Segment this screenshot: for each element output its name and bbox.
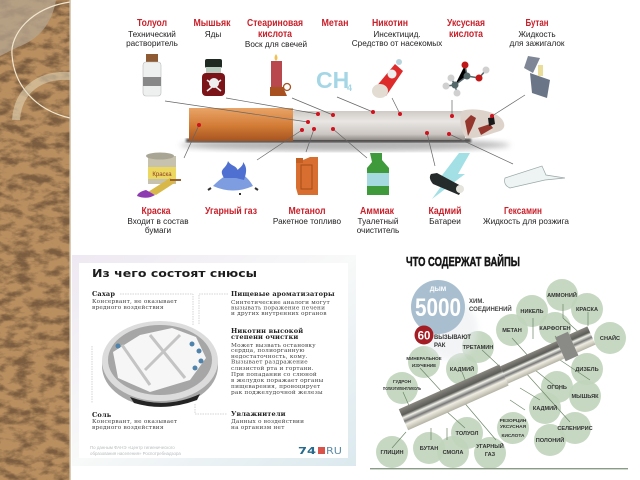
callout: high-purity nicotine: пищеварения, провоцирует	[231, 384, 320, 390]
callout: high-purity nicotine: При попадании со слюной	[231, 372, 317, 378]
icon: toluene bottle	[143, 54, 161, 96]
ingredient labels: МЕТАН	[502, 328, 522, 334]
top labels: Толуол	[137, 17, 167, 29]
ingredient labels: СМОЛА	[443, 450, 463, 456]
top labels: Метан	[322, 17, 348, 29]
ingredient labels: СЕЛЕНИРИС	[557, 426, 593, 432]
callout: food flavourings: и других внутренних органов	[231, 311, 327, 317]
bottom labels: Метанол	[288, 205, 326, 217]
top labels: Жидкость	[518, 30, 556, 39]
bottom labels: Жидкость для розжига	[483, 217, 569, 226]
ingredient labels: АММОНИЙ	[547, 291, 577, 299]
icon: lighter	[524, 56, 550, 98]
callout: sugar: вредного воздействия	[92, 305, 164, 311]
icon: acetic acid molecule	[442, 62, 490, 96]
callout: humectants: Данных о воздействии	[231, 419, 304, 425]
callout: high-purity nicotine	[231, 327, 324, 396]
top labels: Яды	[205, 30, 221, 39]
logo: 74.RU	[298, 446, 342, 457]
logo: 74.RU: 74	[298, 446, 316, 457]
callout: salt: вредного воздействия	[92, 425, 164, 431]
stat: 5000 chemical compounds: СОЕДИНЕНИЙ	[469, 305, 512, 313]
ingredient labels: БУТАН	[420, 446, 438, 452]
stat: 5000 chemical compounds	[411, 280, 512, 360]
stat: 5000 chemical compounds: 5000	[415, 294, 461, 322]
stat: 60 cause cancer	[414, 326, 471, 349]
icon: glass ampoule	[505, 166, 565, 188]
source footnote	[90, 445, 181, 456]
ingredient labels: ТОЛУОЛ	[456, 431, 479, 437]
ingredient labels: ДИЗЕЛЬ	[575, 367, 599, 373]
callout: humectants: на организм нет	[231, 425, 285, 431]
callout: high-purity nicotine: в желудок поражает органы	[231, 378, 324, 384]
ingredient labels: КАДМИЙ	[450, 365, 474, 373]
icon: fuel canister	[296, 157, 318, 195]
ingredient labels: КРАСКА	[576, 307, 598, 313]
ingredient labels: ПОЛОНИЙ	[536, 436, 564, 444]
leader lines	[392, 304, 590, 448]
icon: paint can and brush: Краска	[152, 172, 172, 178]
ingredient labels: ТРЕТАМИН	[463, 345, 493, 351]
source footnote: образования населения» Роспотребнадзора	[90, 451, 181, 456]
callout: salt: Консервант, не оказывает	[92, 419, 177, 425]
bottom labels: Краска	[142, 205, 171, 217]
top labels: Бутан	[526, 17, 548, 29]
callout: sugar	[92, 290, 177, 311]
source footnote: По данным ФАНЭ «Центр гигиенического	[90, 445, 175, 450]
bottom labels: очиститель	[357, 226, 399, 235]
callout: food flavourings: Синтетические аналоги могут	[231, 300, 330, 306]
top labels: Средство от насекомых	[352, 39, 442, 48]
snus tin illustration	[102, 321, 218, 407]
icon: paint can and brush	[137, 152, 181, 198]
background strip: crumpled paper texture	[0, 0, 71, 480]
ingredient labels: ИЗУЧЕНИЕ	[412, 363, 436, 368]
ingredient labels: ГУДРОН	[393, 379, 411, 384]
top labels: кислота	[449, 28, 483, 40]
top labels: Уксусная	[447, 17, 485, 29]
icon: methane formula: 4	[347, 83, 352, 93]
vape panel title: ЧТО СОДЕРЖАТ ВАЙПЫ	[406, 254, 520, 269]
ingredient labels: ГАЗ	[485, 452, 496, 458]
callout: high-purity nicotine: рак поджелудочной железы	[231, 390, 323, 396]
logo: 74.RU: RU	[326, 446, 342, 457]
bottom labels: Ракетное топливо	[273, 217, 342, 226]
top labels: для зажигалок	[510, 39, 565, 48]
callout: salt: Соль	[92, 411, 112, 419]
leader lines and red dots	[165, 95, 525, 166]
stat: 60 cause cancer: ВЫЗЫВАЮТ	[434, 335, 471, 341]
ingredient labels: ГЛИЦИН	[380, 450, 404, 456]
icon: nicotine spray	[372, 59, 403, 98]
top labels: Мышьяк	[194, 17, 231, 29]
top labels: Никотин	[372, 17, 408, 29]
bottom labels: Гексамин	[504, 205, 542, 217]
callout: humectants: Увлажнители	[231, 410, 286, 418]
callout: high-purity nicotine: сердца, полиорганную	[231, 348, 305, 354]
ingredient labels: КИСЛОТА	[502, 433, 525, 439]
callout: high-purity nicotine: недостаточность, кому.	[231, 354, 308, 360]
icon: candle	[270, 54, 290, 96]
ingredient labels: КАДМИЙ	[533, 404, 557, 412]
top labels: растворитель	[126, 39, 178, 48]
bottom labels: Аммиак	[360, 205, 395, 217]
callout: sugar: Консервант, не оказывает	[92, 299, 177, 305]
callout: high-purity nicotine: Вызывает раздражение	[231, 360, 308, 366]
callout: food flavourings	[231, 290, 335, 317]
icon: battery with lightning bolt	[430, 153, 470, 199]
callout: food flavourings: Пищевые ароматизаторы	[231, 290, 335, 298]
ingredient labels: ПОЛИЭТИЛЕНГЛИКОЛЬ	[383, 386, 421, 391]
ingredient labels: РЕЗОРЦИН	[500, 418, 527, 424]
icon: ammonia cleaner bottle	[367, 153, 389, 195]
panel: snus composition	[72, 255, 356, 466]
e-cigarette device	[398, 324, 597, 431]
bottom labels: Входит в состав	[127, 217, 189, 226]
callout: high-purity nicotine: слизистой рта и гортани.	[231, 366, 314, 372]
ingredient labels: КАРФОГЕН	[539, 326, 571, 332]
stat: 60 cause cancer: 60	[418, 330, 430, 342]
stat: 5000 chemical compounds: ДЫМ	[430, 286, 446, 293]
bottom labels	[127, 205, 569, 235]
ingredient circles	[376, 279, 626, 469]
ingredient labels	[380, 291, 620, 458]
callout: high-purity nicotine: Может вызвать остановку	[231, 343, 316, 349]
ingredient labels: МЫШЬЯК	[572, 394, 599, 400]
callout: high-purity nicotine: степени очистки	[231, 333, 298, 341]
top labels: кислота	[258, 28, 292, 40]
ingredient labels: ОГОНЬ	[547, 385, 567, 391]
cigarette	[180, 108, 510, 151]
top labels: Воск для свечей	[245, 40, 307, 49]
panel: cigarette composition	[126, 17, 569, 235]
callout: high-purity nicotine: Никотин высокой	[231, 327, 303, 335]
icon: methane formula: CH	[316, 67, 349, 93]
bottom labels: Кадмий	[428, 205, 462, 217]
stat: 5000 chemical compounds: ХИМ.	[469, 299, 484, 305]
bottom labels: Угарный газ	[205, 205, 257, 217]
ingredient labels: МИНЕРАЛЬНОЕ	[406, 356, 442, 361]
ingredient labels: НИКЕЛЬ	[520, 309, 544, 315]
bottom labels: бумаги	[145, 226, 171, 235]
panel: vape composition	[370, 254, 628, 469]
callout: sugar: Сахар	[92, 290, 115, 298]
icon: gas burner flame	[208, 161, 258, 195]
ingredient labels: УГАРНЫЙ	[476, 442, 504, 450]
snus panel title: Из чего состоят снюсы	[92, 267, 257, 280]
ingredient labels: СНАЙС	[600, 334, 620, 342]
callout: humectants	[231, 410, 304, 431]
bottom labels: Туалетный	[358, 217, 398, 226]
top labels: Стеариновая	[247, 17, 303, 29]
bottom labels: Батареи	[429, 217, 461, 226]
top labels	[126, 17, 565, 49]
top labels: Инсектицид.	[373, 30, 421, 39]
callout frames	[92, 294, 228, 414]
stat: 60 cause cancer: РАК	[434, 343, 446, 349]
top labels: Технический	[128, 30, 176, 39]
callout: food flavourings: вызывать поражение печени	[231, 306, 325, 312]
icon: arsenic jar	[202, 59, 225, 96]
ingredient labels: УКСУСНАЯ	[500, 424, 527, 430]
callout: salt	[92, 411, 177, 431]
